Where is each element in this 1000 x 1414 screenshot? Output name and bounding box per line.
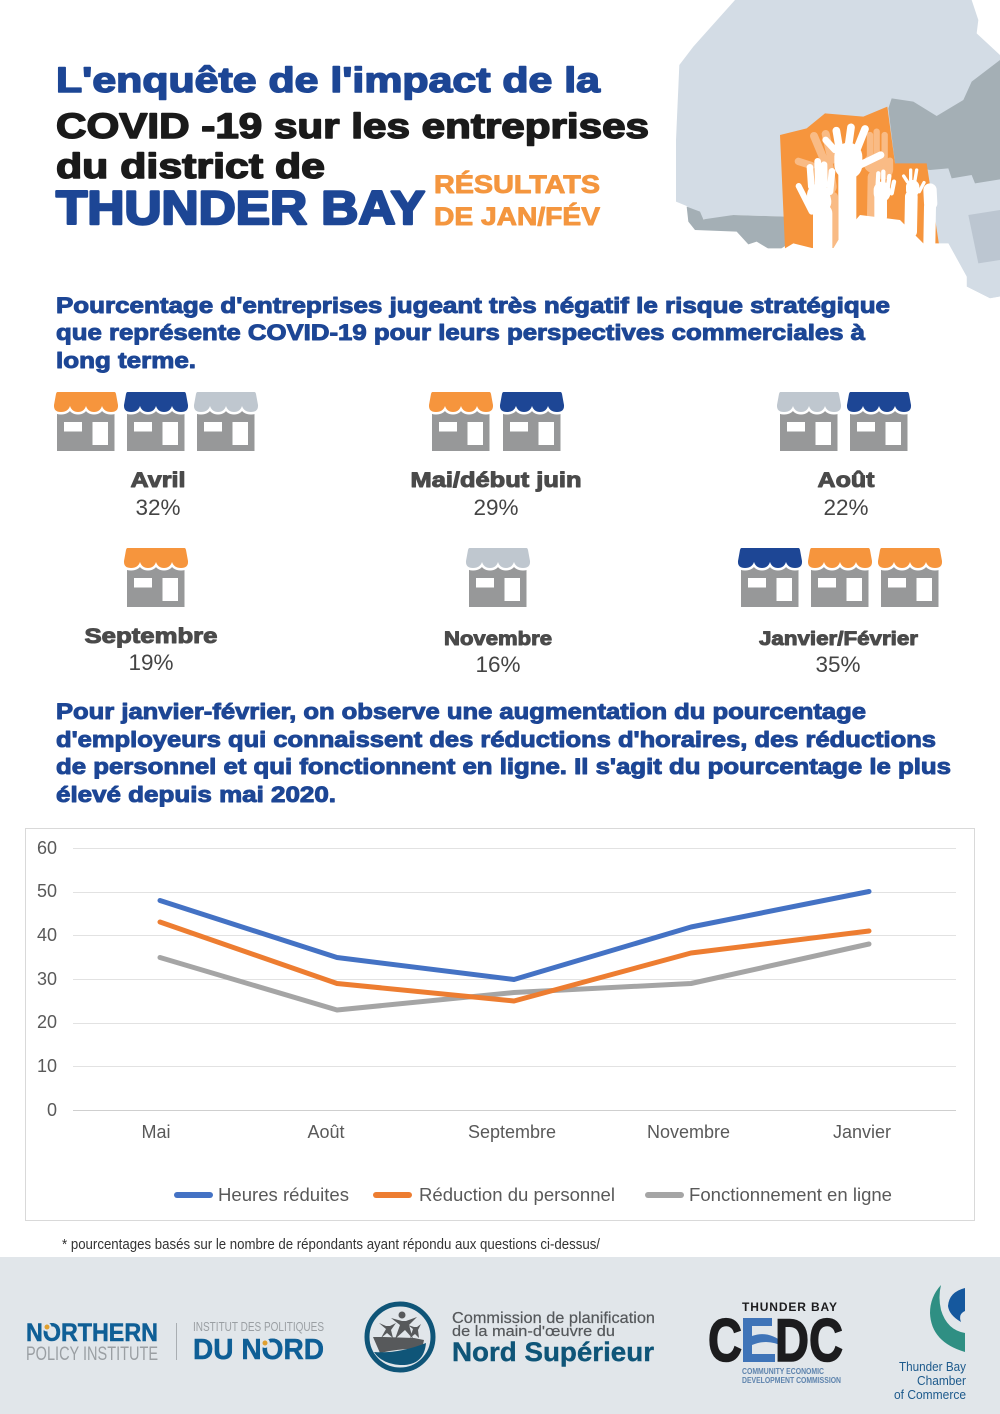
line chart <box>26 828 974 1220</box>
legend <box>177 1185 892 1205</box>
subtitle: results period <box>434 170 600 231</box>
logo: Northern Policy Institute: INSTITUT DES POLITIQUES <box>193 1319 324 1334</box>
stat: Novembre 16%: Novembre <box>444 628 552 650</box>
stat: Novembre 16%: 16% <box>475 652 521 677</box>
white hands <box>799 127 931 248</box>
logo: Northern Policy Institute: NORTHERN <box>26 1319 158 1347</box>
stat: Avril 32% <box>54 392 258 520</box>
title: L'enquête de l'impact de la <box>56 61 601 100</box>
heading: January-February observation: élevé depuis mai 2020. <box>56 782 336 807</box>
subtitle: results period: RÉSULTATS <box>434 170 600 199</box>
stat: Janvier/Février 35%: Janvier/Février <box>759 628 918 650</box>
x axis labels <box>141 1122 891 1142</box>
logo: Thunder Bay Chamber of Commerce: of Commerce <box>894 1387 966 1402</box>
series: Réduction du personnel <box>160 922 869 1001</box>
logo: Thunder Bay CEDC: DEVELOPMENT COMMISSION <box>742 1376 841 1385</box>
stat: Mai/début juin 29% <box>410 392 582 520</box>
logo: Commission de planification <box>367 1304 655 1370</box>
logo: Northern Policy Institute <box>26 1319 324 1366</box>
logo: Thunder Bay CEDC: DC <box>775 1307 843 1374</box>
x axis labels: Août <box>307 1122 345 1142</box>
title <box>56 61 649 234</box>
heading: strategic risk <box>56 293 890 373</box>
logo: Northern Policy Institute: DU NORD <box>193 1334 324 1366</box>
heading: January-February observation: de personnel et qui fonctionnent en ligne. Il s'agit du pourcentage le plus <box>56 754 951 779</box>
white ground <box>667 215 1000 310</box>
stat: Septembre 19% <box>84 548 218 675</box>
title: COVID -19 sur les entreprises <box>56 107 649 146</box>
y axis labels: 50 <box>37 881 57 901</box>
legend: Fonctionnement en ligne <box>689 1185 892 1205</box>
background map with hands <box>667 0 1000 310</box>
y axis labels: 40 <box>37 925 57 945</box>
stat: Août 22% <box>777 392 911 520</box>
stat: Septembre 19%: 19% <box>128 650 174 675</box>
y axis labels: 10 <box>37 1056 57 1076</box>
title: THUNDER BAY <box>56 181 425 234</box>
footer band <box>0 1257 1000 1414</box>
icon: boat emblem <box>367 1304 433 1370</box>
x axis labels: Novembre <box>647 1122 730 1142</box>
logo: Commission de planification: Nord Supérieur <box>452 1337 655 1367</box>
y axis labels: 60 <box>37 838 57 858</box>
logo: Thunder Bay Chamber of Commerce: Chamber <box>917 1373 967 1388</box>
logo: Thunder Bay Chamber of Commerce <box>894 1285 967 1402</box>
logo: Thunder Bay Chamber of Commerce: Thunder Bay <box>899 1359 966 1374</box>
title: du district de <box>56 147 325 186</box>
footnote: * pourcentages basés sur le nombre de répondants ayant répondu aux questions ci-dessus/ <box>62 1236 601 1253</box>
logo: Thunder Bay CEDC: THUNDER BAY <box>742 1300 837 1314</box>
x axis labels: Mai <box>141 1122 171 1142</box>
stat: Mai/début juin 29%: 29% <box>473 495 519 520</box>
heading: strategic risk: Pourcentage d'entreprises jugeant très négatif le risque stratégique <box>56 293 890 318</box>
logo: Commission de planification: de la main-d'œuvre du <box>452 1323 615 1340</box>
x axis labels: Janvier <box>833 1122 891 1142</box>
peach hands behind <box>798 132 890 243</box>
stat: Janvier/Février 35%: 35% <box>815 652 861 677</box>
logo: Commission de planification: Commission de planification <box>452 1310 655 1327</box>
y axis labels: 0 <box>47 1100 57 1120</box>
y axis labels <box>37 838 57 1120</box>
stat: Août 22%: 22% <box>823 495 869 520</box>
subtitle: results period: DE JAN/FÉV <box>434 202 600 231</box>
heading: January-February observation: d'employeurs qui connaissent des réductions d'horaires, des réductions <box>56 727 936 752</box>
heading: strategic risk: que représente COVID-19 pour leurs perspectives commerciales à <box>56 320 866 345</box>
heading: January-February observation <box>56 699 951 807</box>
stat: Janvier/Février 35% <box>738 548 942 677</box>
stat: Août 22%: Août <box>818 468 874 492</box>
legend: Réduction du personnel <box>419 1185 615 1205</box>
y axis labels: 30 <box>37 969 57 989</box>
stat: Septembre 19%: Septembre <box>84 624 218 648</box>
stat: Mai/début juin 29%: Mai/début juin <box>410 468 582 492</box>
series: Heures réduites <box>160 892 869 980</box>
y axis labels: 20 <box>37 1012 57 1032</box>
series: Fonctionnement en ligne <box>160 944 869 1010</box>
stat: Avril 32%: 32% <box>135 495 181 520</box>
stat: Novembre 16% <box>444 548 552 677</box>
logo: Thunder Bay CEDC <box>708 1300 843 1385</box>
legend: Heures réduites <box>218 1185 349 1205</box>
x axis labels: Septembre <box>468 1122 556 1142</box>
heading: January-February observation: Pour janvier-février, on observe une augmentation du pourcentage <box>56 699 866 724</box>
logo: Thunder Bay CEDC: COMMUNITY ECONOMIC <box>742 1367 824 1376</box>
logo: Thunder Bay CEDC: C <box>708 1307 742 1374</box>
logo: Northern Policy Institute: POLICY INSTITUTE <box>26 1344 158 1365</box>
heading: strategic risk: long terme. <box>56 348 196 373</box>
stat: Avril 32%: Avril <box>130 468 186 492</box>
